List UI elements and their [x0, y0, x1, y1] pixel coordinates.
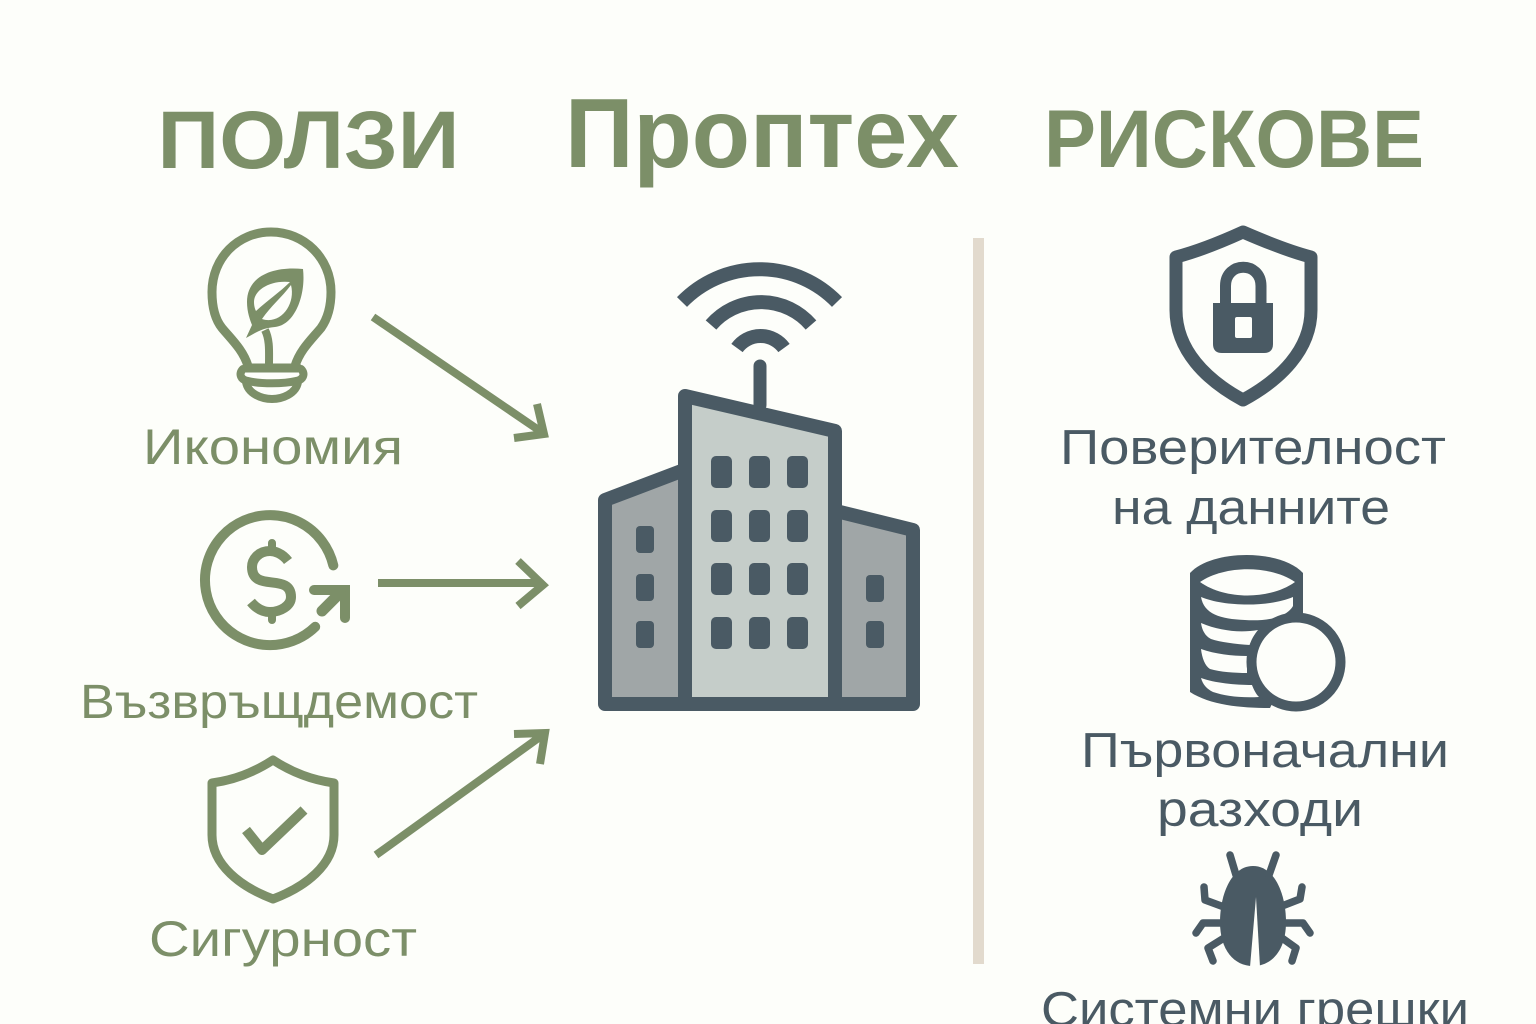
arrow: bottom: [376, 733, 545, 855]
heading: рискове: РИСКОВЕ: [1044, 94, 1424, 185]
icon: bug: [1196, 855, 1310, 967]
label: Поверителност на данните: [1060, 421, 1446, 535]
icon: shield with padlock: [1176, 232, 1311, 400]
label: Първоначални разходи: [1081, 724, 1449, 837]
label: Поверителност на данните: Поверителност: [1060, 421, 1446, 475]
label: Икономия: Икономия: [143, 419, 403, 475]
label: Първоначални разходи: разходи: [1157, 783, 1363, 837]
icon: smart building: [605, 269, 913, 704]
label: Поверителност на данните: на данните: [1112, 481, 1390, 535]
divider: [973, 238, 984, 964]
icon: database with coin: [1190, 555, 1340, 708]
arrow: middle: [378, 561, 543, 606]
label: Сигурност: Сигурност: [149, 911, 417, 967]
icon: dollar return: [205, 515, 345, 645]
icon: shield with check: [212, 760, 334, 899]
label: Възвръщдемост: Възвръщдемост: [80, 676, 478, 729]
arrow: top: [373, 317, 544, 438]
heading: ползи: ПОЛЗИ: [158, 95, 459, 186]
icon: light bulb with leaf: [212, 232, 331, 399]
heading: Проптех: Проптех: [565, 78, 959, 188]
label: Първоначални разходи: Първоначални: [1081, 724, 1449, 778]
